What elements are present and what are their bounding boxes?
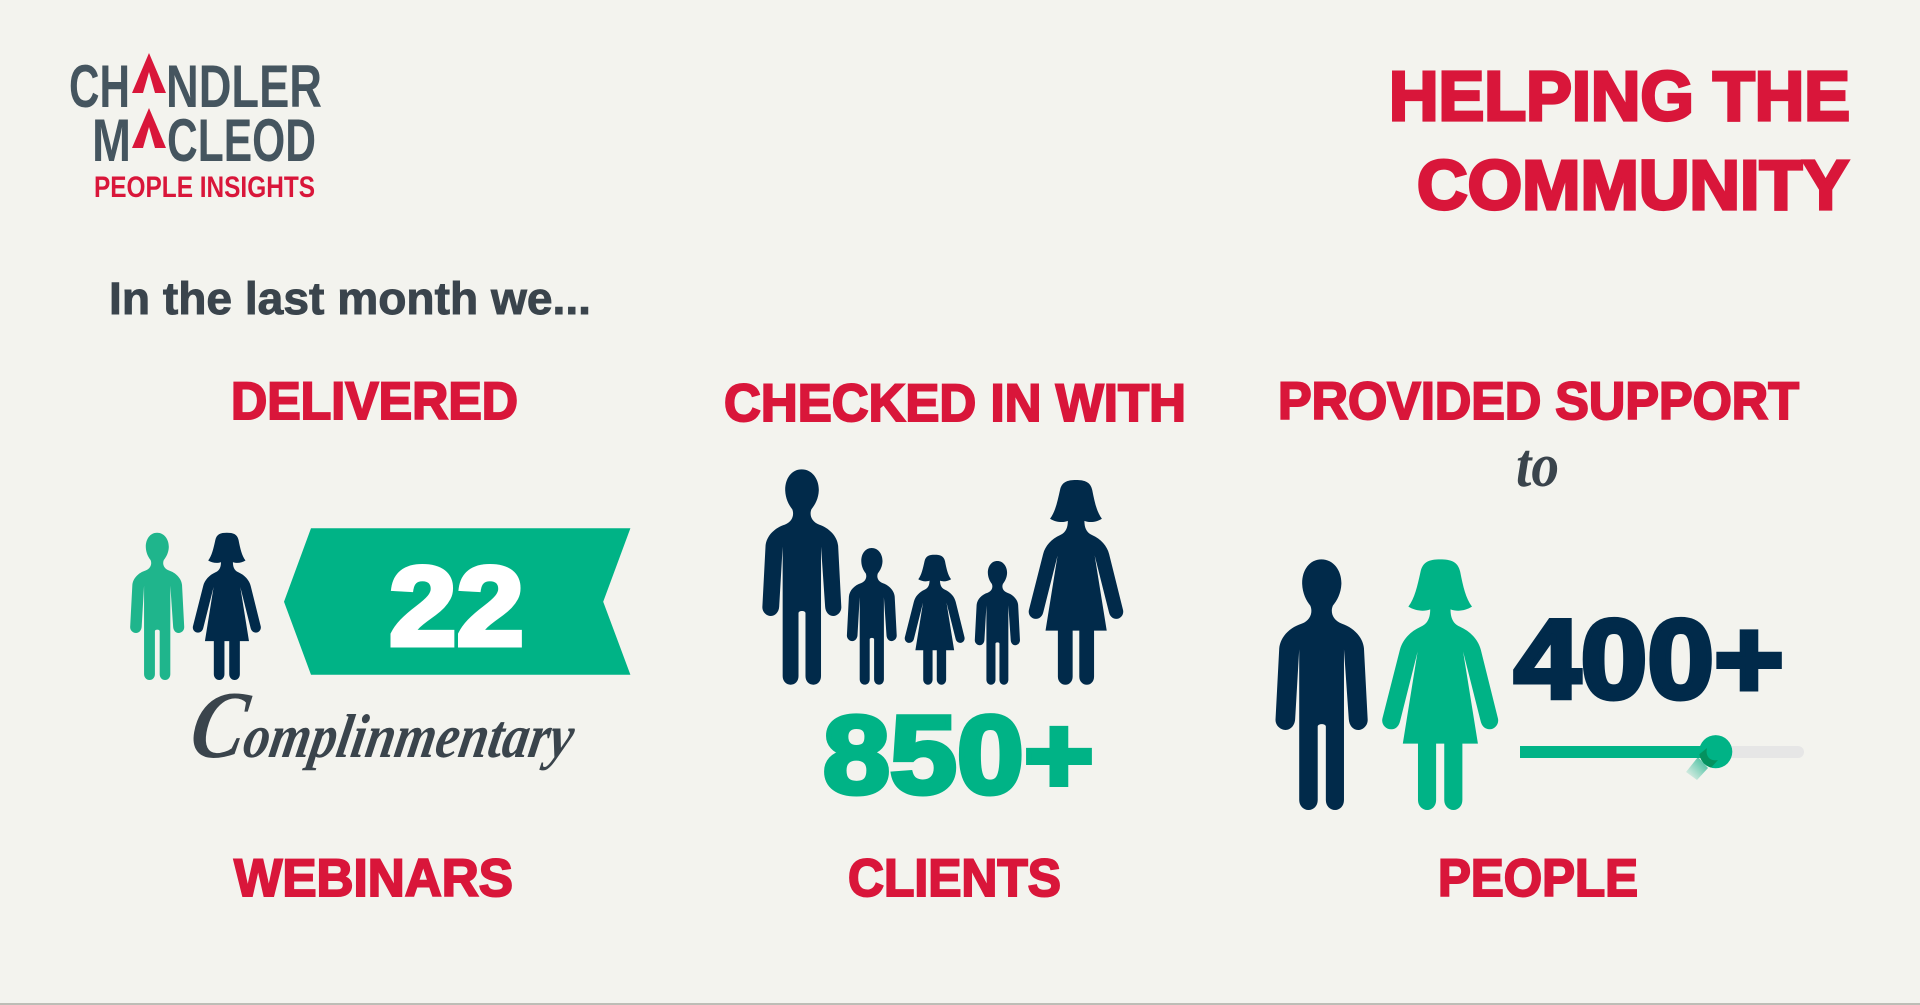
heading: checked in with: CHECKED IN WITH xyxy=(724,374,1186,433)
panel: webinars xyxy=(130,372,630,908)
icon: green woman xyxy=(1382,559,1498,810)
ribbon with number 22 xyxy=(284,528,630,675)
label: clients: CLIENTS xyxy=(848,849,1061,908)
logo: Chandler Macleod People Insights: CH xyxy=(69,53,130,120)
ribbon with number 22: 22 xyxy=(389,544,524,669)
logo: Chandler Macleod People Insights: PEOPLE INSIGHTS xyxy=(94,171,315,204)
panel: people xyxy=(1276,372,1804,908)
intro text: In the last month we... xyxy=(109,273,591,324)
script word: complimentary: Complinmentary xyxy=(183,672,585,778)
heading: delivered: DELIVERED xyxy=(231,372,518,431)
logo: Chandler Macleod People Insights: NDLER xyxy=(166,53,322,120)
icon: navy man xyxy=(1276,559,1368,810)
label: webinars: WEBINARS xyxy=(234,849,513,908)
label: people: PEOPLE xyxy=(1438,849,1638,908)
title: Helping the Community xyxy=(1389,57,1850,224)
number: 850+: 850+ xyxy=(823,694,1094,817)
panel: clients xyxy=(724,374,1186,908)
number: 400+: 400+ xyxy=(1514,597,1784,722)
heading: provided support: PROVIDED SUPPORT xyxy=(1278,372,1799,431)
icon: family of five xyxy=(762,469,1123,685)
title: Helping the Community: HELPING THE xyxy=(1389,57,1850,135)
icon: navy woman xyxy=(193,533,261,680)
slider xyxy=(1520,735,1804,780)
logo: Chandler Macleod People Insights: CLEOD xyxy=(167,107,316,174)
script word: to: to xyxy=(1516,432,1559,500)
title: Helping the Community: COMMUNITY xyxy=(1417,146,1849,224)
icon: green man xyxy=(130,533,184,680)
logo: Chandler Macleod People Insights: M xyxy=(92,107,131,174)
logo: Chandler Macleod People Insights xyxy=(69,53,322,204)
